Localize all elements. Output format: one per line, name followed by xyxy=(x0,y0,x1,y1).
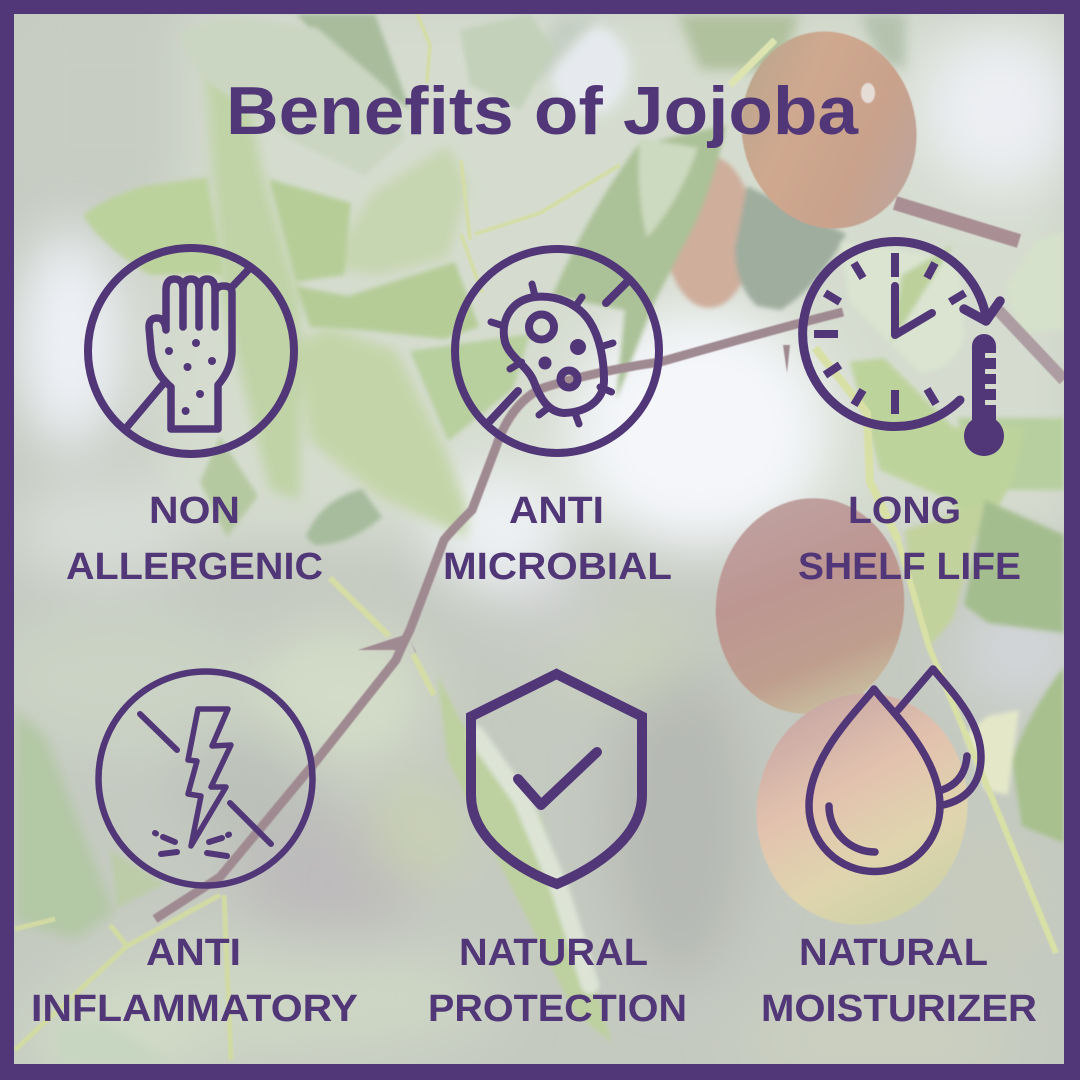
label: natural protection xyxy=(428,932,687,1030)
label: long shelf life xyxy=(798,490,1021,588)
label: non allergenic: NON xyxy=(149,490,240,532)
label: natural moisturizer: NATURAL xyxy=(799,932,988,974)
label: natural protection: NATURAL xyxy=(459,932,648,974)
label: anti inflammatory: ANTI xyxy=(146,932,241,974)
label: anti microbial: MICROBIAL xyxy=(443,546,672,588)
label: natural protection: PROTECTION xyxy=(428,988,687,1030)
benefit: natural protection xyxy=(428,674,687,1030)
label: anti microbial xyxy=(443,490,672,588)
icon: shield with check mark xyxy=(471,674,642,884)
benefit: long shelf life xyxy=(798,242,1021,588)
label: non allergenic xyxy=(66,490,323,588)
icon: crossed-out lightning bolt xyxy=(98,672,312,886)
label: long shelf life: SHELF LIFE xyxy=(798,546,1021,588)
title: Benefits of Jojoba xyxy=(226,73,859,149)
label: natural moisturizer: MOISTURIZER xyxy=(761,988,1037,1030)
fruits xyxy=(723,15,935,245)
icon: two water drops xyxy=(809,669,981,872)
label: anti inflammatory: INFLAMMATORY xyxy=(31,988,358,1030)
benefit: natural moisturizer xyxy=(761,669,1037,1030)
branches xyxy=(895,203,1019,241)
label: non allergenic: ALLERGENIC xyxy=(66,546,323,588)
icon: clock with arrow and thermometer xyxy=(803,242,1004,456)
benefit: non allergenic xyxy=(66,248,323,588)
label: anti inflammatory xyxy=(31,932,358,1030)
icon: crossed-out hand with rash xyxy=(88,248,294,454)
benefit: anti inflammatory xyxy=(31,672,358,1030)
label: anti microbial: ANTI xyxy=(509,490,604,532)
label: long shelf life: LONG xyxy=(848,490,961,532)
label: natural moisturizer xyxy=(761,932,1037,1030)
benefit: anti microbial xyxy=(443,249,672,588)
icon: crossed-out microbe xyxy=(455,249,659,453)
